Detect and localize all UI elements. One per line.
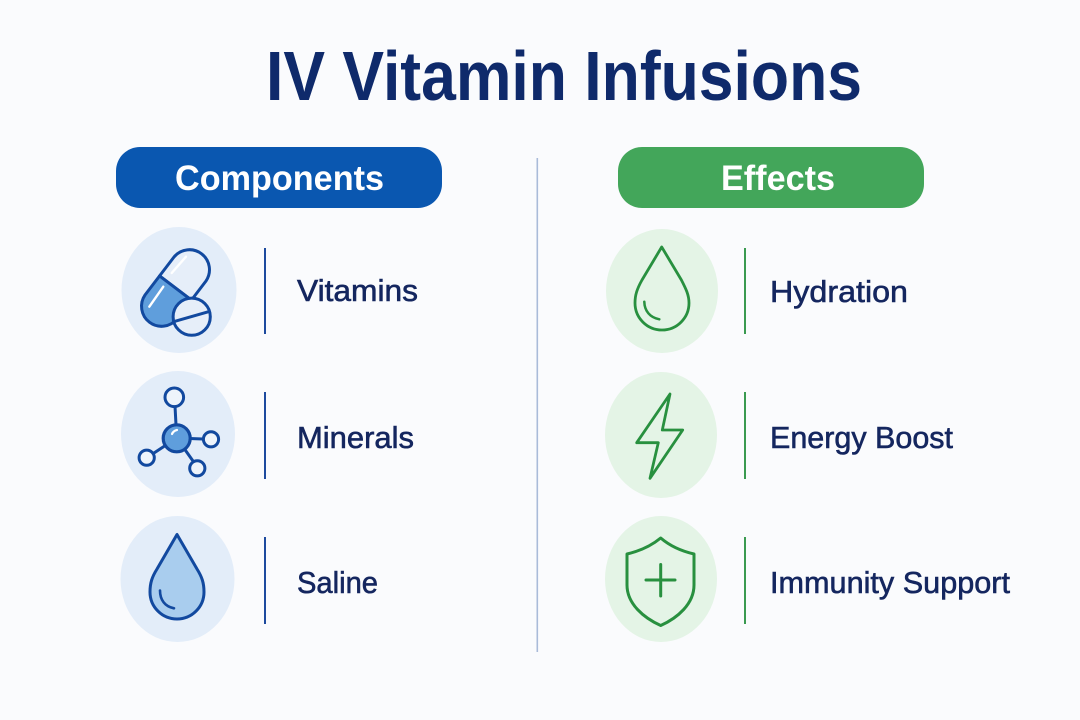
heading: components: Components: [175, 159, 384, 198]
center divider: [536, 158, 538, 652]
label: energy boost: Energy Boost: [770, 420, 953, 455]
divider: vitamins: [264, 248, 266, 334]
icon: capsule and tablet: [122, 227, 236, 353]
title: IV Vitamin Infusions: [266, 37, 862, 115]
divider: saline: [264, 537, 266, 624]
label: minerals: Minerals: [297, 420, 414, 455]
row: immunity support: [605, 516, 1010, 642]
divider: hydration: [744, 248, 746, 334]
label: immunity support: Immunity Support: [770, 565, 1010, 600]
divider: immunity support: [744, 537, 746, 624]
icon: hydration drop: [606, 229, 718, 353]
divider: energy boost: [744, 392, 746, 479]
heading: components: [116, 147, 442, 208]
row: hydration: [606, 229, 908, 353]
label: saline: Saline: [297, 565, 378, 600]
divider: minerals: [264, 392, 266, 479]
panel: components: [116, 147, 442, 642]
panel: effects: [605, 147, 1010, 642]
row: minerals: [121, 371, 414, 497]
row: saline: [120, 516, 378, 642]
icon: shield with plus: [605, 516, 717, 642]
row: energy boost: [605, 372, 953, 498]
heading: effects: Effects: [721, 159, 835, 198]
icon: lightning bolt: [605, 372, 717, 498]
row: vitamins: [122, 227, 418, 353]
icon: molecule: [121, 371, 235, 497]
icon: water drop: [120, 516, 234, 642]
heading: effects: [618, 147, 924, 208]
label: hydration: Hydration: [770, 274, 908, 309]
label: vitamins: Vitamins: [297, 273, 418, 308]
